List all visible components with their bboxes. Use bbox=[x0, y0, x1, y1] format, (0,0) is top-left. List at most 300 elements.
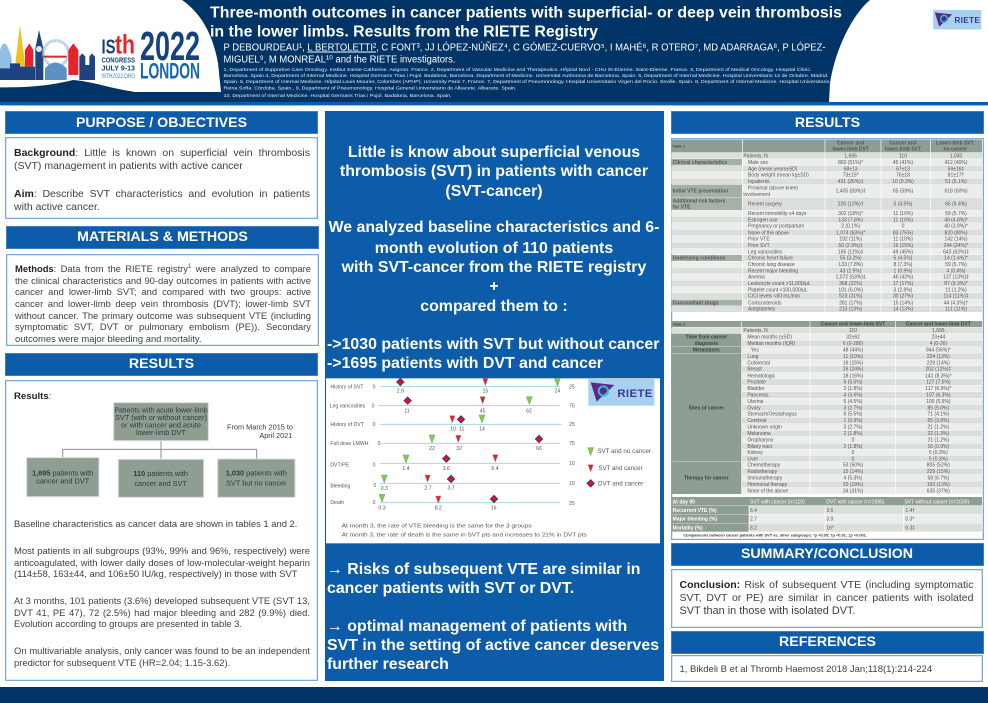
SVT column: 45 (41%) bbox=[893, 160, 913, 166]
SVT column: 16 (15%) bbox=[893, 243, 913, 249]
title: Three-month outcomes in cancer patients with superficial- or deep vein thrombosis bbox=[210, 4, 842, 22]
table 2 row labels: Prostate bbox=[747, 380, 766, 386]
table 2 SVT column: 32±62 bbox=[846, 334, 860, 340]
row labels: Pregnancy or postpartum bbox=[748, 224, 804, 230]
table 2 row labels: Cerebral bbox=[747, 418, 767, 424]
heading: summary / conclusion: SUMMARY/CONCLUSION bbox=[741, 546, 913, 562]
row labels: Anemia bbox=[748, 275, 765, 281]
DVT column: 281 (17%) bbox=[839, 300, 863, 306]
icon: London skyline bbox=[0, 25, 133, 102]
panel: central key messages: Little is know about superficial venous bbox=[348, 144, 640, 161]
category labels: Underlying conditions bbox=[673, 256, 726, 262]
row labels: History of DVT bbox=[330, 422, 365, 428]
row labels: CrCl levels <60 mL/min bbox=[748, 294, 800, 300]
row labels: Chronic lung disease bbox=[748, 262, 795, 268]
row labels: Prior SVT bbox=[748, 243, 770, 249]
row labels: 0 bbox=[373, 483, 376, 489]
table 1: baseline characteristics: no cancer bbox=[944, 147, 967, 153]
DVT column: 43 (2.5%) bbox=[840, 268, 862, 274]
panel: results text and flowchart: Results: bbox=[14, 391, 51, 402]
panel: central key messages: month evolution of 110 patients bbox=[375, 240, 613, 257]
table 3: outcomes at day 90: Comparisons between cancer patients with SVT vs. other subgroups: *p <0.05; †p <0.01; ‡p <0.001. bbox=[683, 533, 867, 537]
table 3: outcomes at day 90: SVT without cancer (n=1030) bbox=[904, 499, 969, 505]
table 2 row labels: Immunotherapy bbox=[747, 475, 783, 481]
table 2 DVT column bbox=[925, 328, 952, 494]
table 2 bands bbox=[671, 327, 982, 494]
panel: purpose text: Background: Little is known on superficial vein thrombosis bbox=[14, 147, 310, 159]
panel: results text and flowchart: At 3 months, 101 patients (3.6%) developed subsequent VTE (SVT 13, bbox=[14, 595, 310, 606]
heading: results right bbox=[671, 111, 984, 134]
DVT column: 2 (0.1%) bbox=[841, 224, 860, 230]
table 2 DVT column: 193 (13%) bbox=[927, 482, 950, 488]
panel: central key messages: + bbox=[489, 278, 499, 295]
panel: results text and flowchart: On multivariable analysis, only cancer was found to be an independent bbox=[14, 645, 310, 656]
table 2 and table 3: cancer details and day 90 outcomes: Cancer and lower-limb SVT bbox=[821, 322, 885, 328]
table 2 SVT column: 2 (1.8%) bbox=[844, 444, 863, 450]
table 2 row labels: Chemotherapy bbox=[747, 463, 781, 469]
no cancer column: 59±16‡ bbox=[948, 166, 965, 172]
table 2 categories: Therapy for cancer bbox=[684, 476, 729, 482]
category labels: Clinical characteristics bbox=[673, 160, 727, 166]
panel: references text: 1, Bikdeli B et al Thromb Haemost 2018 Jan;118(1):214-224 bbox=[680, 664, 932, 675]
table 3: outcomes at day 90: 3.9 bbox=[826, 517, 834, 523]
DVT column: 50 (2.9%)‡ bbox=[838, 243, 863, 249]
value labels: 14 bbox=[479, 427, 485, 433]
row labels bbox=[743, 153, 811, 313]
table 2 DVT column: 635 (37%) bbox=[927, 488, 950, 494]
heading: references bbox=[671, 631, 984, 654]
table 2 row labels: Bladder bbox=[747, 386, 765, 392]
markers: DVT and cancer bbox=[397, 378, 543, 503]
no cancer column: 114 (11%)‡ bbox=[943, 294, 969, 300]
row labels: Patients, N bbox=[743, 153, 768, 159]
value labels: 2.7 bbox=[424, 486, 432, 492]
panel: results text and flowchart: anticoagulated, with lower daily doses of low-molecular-weight heparin bbox=[14, 557, 310, 568]
panel: conclusion text: SVT, DVT or PE) are similar in cancer patients with isolated bbox=[680, 592, 974, 604]
row labels: None of the above bbox=[748, 230, 789, 236]
no cancer column: 4 (0.4%) bbox=[947, 268, 966, 274]
heading: results right: RESULTS bbox=[795, 114, 860, 130]
table 2 row labels: Liver bbox=[747, 456, 759, 462]
table 1: baseline characteristics: Table 1 bbox=[673, 144, 685, 148]
logo: ISTH 2022 London: LONDON bbox=[140, 58, 200, 84]
table 2 DVT column: 21 (1.2%) bbox=[927, 425, 950, 431]
chart footnote: At month 3, the rate of death is the same in SVT pts and increases to 21% in DVT pts bbox=[342, 533, 587, 539]
table 2 SVT column: 26 (24%) bbox=[843, 367, 863, 373]
row bands bbox=[671, 153, 982, 312]
panel: methods text: cancer and lower-limb deep vein thrombosis (DVT); lower-limb SVT bbox=[15, 298, 311, 309]
panel: central key messages bbox=[324, 111, 664, 681]
value labels: 6.4 bbox=[491, 466, 499, 472]
category labels: for VTE bbox=[673, 205, 691, 211]
DVT column: 431 (26%)‡ bbox=[838, 179, 864, 185]
table 2 and table 3: cancer details and day 90 outcomes bbox=[671, 321, 982, 538]
row labels: Age (mean years±SD) bbox=[748, 166, 798, 172]
table 2 DVT column: 229 (14%) bbox=[927, 360, 950, 366]
no cancer column: 87 (9.3%)* bbox=[944, 281, 968, 287]
table 2 SVT column: 0 bbox=[852, 437, 855, 443]
affiliations: Reina Sofía. Córdoba. Spain., 9, Department of Pneumonology. Hospital General Universitario de Albacete. Albacete. Spain. bbox=[224, 85, 516, 91]
table 3: outcomes at day 90: 0.3* bbox=[905, 517, 914, 523]
table 2 DVT column: 229 (15%) bbox=[927, 469, 950, 475]
table 2 categories: Sites of cancer bbox=[689, 406, 724, 412]
table 2 row labels: Melanoma bbox=[747, 431, 771, 437]
table 2 row labels: Median months (IQR) bbox=[747, 341, 795, 347]
logo: RIETE: RIETE bbox=[617, 388, 653, 400]
DVT column: 1,072 (63%)‡ bbox=[836, 275, 866, 281]
table 2 DVT column: 85 (5.0%) bbox=[927, 405, 950, 411]
no cancer column: 137 (13%)‡ bbox=[943, 275, 969, 281]
SVT column: 110 bbox=[899, 153, 907, 159]
table 2 SVT column: 6 (0-280) bbox=[843, 341, 863, 347]
table 2 DVT column: 5 (0.3%) bbox=[929, 450, 948, 456]
SVT column: 5 (4.5%) bbox=[894, 202, 913, 208]
no cancer column: 820 (80%) bbox=[944, 230, 968, 236]
table 1: baseline characteristics: Cancer and bbox=[889, 141, 917, 147]
DVT column: 860 (51%)* bbox=[838, 160, 863, 166]
table 1: baseline characteristics: lower-limb DVT bbox=[832, 147, 869, 153]
SVT column: 67±13 bbox=[896, 166, 910, 172]
panel: methods text: symptomatic SVT, DVT or pulmonary embolism (PE)). Secondary bbox=[15, 321, 311, 332]
SVT column: 3 (2.9%) bbox=[894, 287, 913, 293]
authors: MIGUEL⁹, M MONREAL¹⁰ and the RIETE investigators. bbox=[224, 54, 456, 66]
table 2 DVT column: 58 (6.7%) bbox=[927, 475, 950, 481]
SVT column: 8 (7.3%) bbox=[894, 262, 913, 268]
affiliations: Spain. 6, Department of Internal Medicine. Hôpital Louis Mourier, Colombes (APHP), University Paris 7. France. 7, Department of Pneumonology. Hospital Universitario Virgen del Rocío. Seville. Spain. 8, Department of Internal Medicine. Hospital Universitario bbox=[224, 79, 830, 85]
value labels: 8.2 bbox=[435, 505, 442, 511]
panel: central key messages: → Risks of subsequent VTE are similar in bbox=[327, 561, 640, 578]
value labels: 24 bbox=[554, 389, 560, 395]
panel: central key messages: thrombosis (SVT) in patients with cancer bbox=[340, 163, 648, 180]
SVT column bbox=[892, 153, 914, 313]
row labels: Full dose LMWH bbox=[330, 441, 369, 447]
title: in the lower limbs. Results from the RIETE Registry bbox=[210, 24, 598, 40]
table 3: outcomes at day 90: 16* bbox=[826, 525, 834, 531]
table 2 DVT column: 117 (6.9%)* bbox=[925, 386, 951, 392]
no cancer column: 59 (5.7%) bbox=[945, 262, 967, 268]
panel: results text and flowchart: Baseline characteristics as cancer data are shown in tables 1 and 2. bbox=[14, 518, 297, 529]
chart footnote: At month 3, the rate of VTE bleeding is the same for the 3 groups bbox=[342, 524, 532, 530]
panel: central key messages: → optimal management of patients with bbox=[327, 618, 627, 635]
table 1: baseline characteristics bbox=[671, 140, 982, 313]
table 2 SVT column: 18 (16%) bbox=[843, 373, 863, 379]
logo: ISTH 2022 London: JULY 9-13 bbox=[102, 66, 135, 72]
panel: methods text: the clinical characteristics and 90-day outcomes in patients with active bbox=[15, 275, 311, 286]
table 2 and table 3: cancer details and day 90 outcomes: Table 2 bbox=[673, 322, 685, 326]
table 2 DVT column: 65 (3.8%) bbox=[927, 418, 950, 424]
row labels: 25 bbox=[569, 501, 575, 507]
table 2 SVT column: 53 (50%) bbox=[843, 463, 863, 469]
table 2 SVT column: 15 (14%) bbox=[843, 469, 863, 475]
panel: results text and flowchart: Most patients in all subgroups (93%, 99% and 96%, respectively) were bbox=[14, 545, 310, 556]
heading: results left bbox=[5, 352, 318, 376]
panel: central key messages: with SVT-cancer from the RIETE registry bbox=[342, 259, 646, 276]
panel: central key messages: compared them to : bbox=[420, 298, 568, 315]
no cancer column: 11 (1.2%) bbox=[945, 287, 967, 293]
no cancer column: 51 (5.1%) bbox=[945, 179, 967, 185]
table 1: baseline characteristics: Lower-limb SVT, bbox=[936, 141, 975, 147]
markers: SVT and no cancer bbox=[379, 378, 560, 502]
row labels: Leg varicosities bbox=[330, 404, 366, 410]
table 3: outcomes at day 90: 1.4† bbox=[905, 508, 915, 514]
SVT column: 11 (10%) bbox=[893, 217, 913, 223]
flowchart: patient groups: or with cancer and acute bbox=[121, 420, 201, 429]
DVT column: 213 (13%) bbox=[839, 307, 863, 313]
table 2 SVT column: 6 (5.5%) bbox=[844, 412, 863, 418]
table 2 DVT column: 127 (7.5%) bbox=[926, 380, 951, 386]
DVT column: 226 (13%)† bbox=[838, 202, 864, 208]
authors: P DEBOURDEAU¹, L BERTOLETTI², C FONT³, JJ LÓPEZ-NÚÑEZ⁴, C GÓMEZ-CUERVO⁵, I MAHÉ⁶, R OTERO⁷, MD ADARRAGA⁸, P LÓPEZ- bbox=[224, 40, 826, 54]
row labels: Recent major bleeding bbox=[748, 268, 798, 274]
logo: ISTH 2022 London: th bbox=[115, 30, 135, 60]
heading: materials and methods: MATERIALS & METHODS bbox=[77, 229, 248, 245]
DVT column: 1,695 bbox=[844, 153, 857, 159]
row labels: 75 bbox=[569, 403, 575, 409]
flowchart: patient groups: 110 patients with bbox=[133, 469, 188, 478]
no cancer column: 244 (24%)* bbox=[943, 243, 969, 249]
logo: ISTH 2022 London: CONGRESS bbox=[102, 58, 135, 64]
row labels: involvement bbox=[743, 192, 771, 198]
SVT column: 46 (42%) bbox=[893, 275, 913, 281]
panel: central key messages: further research bbox=[327, 656, 449, 673]
table 2 row labels: Unknown origin bbox=[747, 425, 782, 431]
table 2 SVT column: 3 (2.7%) bbox=[844, 405, 863, 411]
header banner bbox=[0, 0, 988, 106]
row labels: Recent surgery bbox=[748, 202, 782, 208]
value labels: 66 bbox=[536, 446, 542, 452]
panel: methods text: without cancer. The primary outcome was subsequent VTE (including bbox=[15, 310, 311, 321]
table 2 row labels: Pancreas bbox=[747, 393, 769, 399]
table 2 SVT column: 20 (19%) bbox=[843, 482, 863, 488]
table 2 DVT column: 107 (6.3%) bbox=[926, 393, 951, 399]
no cancer column: 40 (3.9%)* bbox=[944, 224, 968, 230]
table 2 row labels: Biliary tract bbox=[747, 444, 773, 450]
value labels: 15 bbox=[482, 389, 488, 395]
SVT column: 11 (10%) bbox=[893, 237, 913, 243]
table 2 row labels: Ovary bbox=[747, 405, 761, 411]
table 2 SVT column: 0 bbox=[852, 456, 855, 462]
table 2 row labels bbox=[743, 328, 797, 494]
legend: DVT and cancer bbox=[598, 481, 643, 487]
no cancer column: 1,030 bbox=[950, 153, 962, 159]
no cancer column: 49 (4.8%)* bbox=[944, 217, 968, 223]
row labels: Inpatients bbox=[748, 179, 770, 185]
table 1: baseline characteristics: lower-limb SVT bbox=[885, 147, 921, 153]
SVT column: 1 (0.9%) bbox=[894, 268, 913, 274]
logo: ISTH 2022 London: IS bbox=[102, 36, 116, 58]
table 2 SVT column: 11 (10%) bbox=[843, 354, 863, 360]
table 2 DVT column: 21 (1.2%) bbox=[927, 437, 950, 443]
DVT column: 185 (11%)‡ bbox=[838, 249, 864, 255]
table 2 SVT column: 2 (1.8%) bbox=[844, 431, 863, 437]
row labels: History of SVT bbox=[330, 384, 364, 390]
table 3: outcomes at day 90: 3.6 bbox=[826, 508, 834, 514]
panel: central key messages: We analyzed baseline characteristics and 6- bbox=[329, 219, 659, 236]
table 2 DVT column: 202 (12%)‡ bbox=[925, 367, 951, 373]
logo: RIETE bbox=[588, 379, 654, 406]
row labels: 0 bbox=[373, 422, 376, 428]
SVT column: 83 (75%) bbox=[893, 230, 913, 236]
value labels: 62 bbox=[526, 408, 532, 414]
row labels: 0 bbox=[373, 463, 376, 469]
value labels: 32 bbox=[456, 446, 462, 452]
row labels: 10 bbox=[569, 481, 575, 487]
panel: purpose text: with active cancer. bbox=[14, 201, 100, 213]
legend: SVT and no cancer bbox=[597, 449, 651, 455]
table 2 row labels: Uterine bbox=[747, 399, 764, 405]
panel: results text and flowchart: DVT 41, PE 47), 72 (2.5%) had major bleeding and 282 (9.9%) died. bbox=[14, 607, 310, 618]
logo: ISTH 2022 London bbox=[102, 23, 200, 84]
DVT column: 1,074 (63%)* bbox=[836, 230, 865, 236]
table 2 DVT column: 141 (8.3%)* bbox=[925, 373, 952, 379]
panel: results text and flowchart: (114±58, 163±44, and 106±50 IU/kg, respectively) in those with SVT bbox=[14, 568, 298, 579]
table 2 row labels: Stomach/Oesophagus bbox=[747, 412, 797, 418]
DVT column: 368 (22%) bbox=[839, 281, 863, 287]
panel: references text bbox=[670, 655, 983, 682]
title bbox=[210, 4, 842, 40]
SVT column: 11 (10%) bbox=[893, 211, 913, 217]
table 3: outcomes at day 90: DVT with cancer (n=1695) bbox=[826, 499, 885, 505]
table 2 row labels: Colorectal bbox=[747, 360, 770, 366]
table 2 SVT column: 2 (1.8%) bbox=[844, 386, 863, 392]
value labels: 45 bbox=[480, 408, 486, 414]
table 3: outcomes at day 90: 6.4 bbox=[750, 508, 757, 514]
table 2 row labels: Hormonal therapy bbox=[747, 482, 788, 488]
panel: central key messages: ->1695 patients with DVT and cancer bbox=[327, 355, 603, 372]
table 2 SVT column: 5 (4.5%) bbox=[844, 399, 863, 405]
table 2 and table 3: cancer details and day 90 outcomes: Cancer and lower-limb DVT bbox=[906, 322, 971, 328]
panel: central key messages: cancer patients with SVT or DVT. bbox=[327, 580, 574, 597]
table 2 DVT column: 4 (0-26) bbox=[930, 341, 947, 347]
SVT column: 65 (59%) bbox=[893, 189, 913, 195]
table 3: outcomes at day 90: Major bleeding (%) bbox=[673, 517, 717, 523]
row labels: Male sex bbox=[748, 160, 769, 166]
no cancer column: 111 (11%) bbox=[945, 307, 967, 313]
chart footnote bbox=[342, 524, 587, 539]
no cancer column: 412 (40%) bbox=[944, 160, 968, 166]
table 2 DVT column: 5 (0.3%) bbox=[929, 456, 948, 462]
value labels: 16 bbox=[491, 505, 497, 511]
table 3: outcomes at day 90: Mortality (%) bbox=[673, 525, 703, 531]
heading: summary / conclusion bbox=[670, 543, 984, 566]
row labels: Estrogen use bbox=[748, 217, 778, 223]
row labels: 10 bbox=[569, 461, 575, 467]
panel: results tables bbox=[670, 138, 984, 540]
panel: central key messages: ->1030 patients with SVT but without cancer bbox=[327, 336, 659, 353]
row labels: Prior VTE bbox=[748, 237, 770, 243]
table 2 SVT column: 110 bbox=[849, 328, 857, 334]
row labels: Proximal (above knee) bbox=[748, 186, 798, 192]
table 2 row labels: Patients, N bbox=[743, 328, 768, 334]
category labels: Concomitant drugs bbox=[673, 300, 719, 306]
affiliations: Barcelona. Spain.4, Department of Internal Medicine. Hospital Germans Trias i Pujol. Badalona, Barcelona. Department of Medicine. Universitat Autònoma de Barcelona. Spain. 5, Department of Internal Medicine. Hospital Universitario 12 de Octubre. Madrid. bbox=[224, 73, 828, 79]
flowchart: patient groups: April 2021 bbox=[259, 431, 292, 440]
table 2 DVT column: 1,695 bbox=[932, 328, 945, 334]
DVT column: 192 (11%) bbox=[839, 237, 862, 243]
table 2 DVT column: 224 (13%) bbox=[927, 354, 950, 360]
table 2 row labels: Kidney bbox=[747, 450, 763, 456]
table 2 categories: diagnosis bbox=[695, 341, 718, 347]
table 2 DVT column: 16 (0.9%) bbox=[927, 444, 950, 450]
row labels: 0 bbox=[372, 404, 375, 410]
value labels: 3.6 bbox=[443, 466, 450, 472]
table 2 categories bbox=[684, 335, 729, 482]
DVT column: 55 (3.2%) bbox=[840, 256, 862, 262]
heading: results left: RESULTS bbox=[129, 356, 194, 372]
panel: purpose text: Aim: Describe SVT characteristics and evolution in patients bbox=[14, 188, 310, 200]
flowchart: patient groups: SVT (with or without cancer) bbox=[115, 413, 207, 422]
flowchart: patient groups: SVT but no cancer bbox=[226, 479, 287, 488]
row labels: Bleeding bbox=[330, 483, 351, 489]
SVT column: 15 (14%) bbox=[893, 300, 913, 306]
SVT column: 49 (45%) bbox=[893, 249, 913, 255]
DVT column: 73±15* bbox=[843, 173, 859, 179]
row labels: Leg varicosities bbox=[748, 249, 783, 255]
flowchart: patient groups: From March 2015 to bbox=[227, 422, 293, 431]
row labels: Chronic heart failure bbox=[748, 256, 793, 262]
legend bbox=[587, 448, 651, 487]
panel: central key messages: (SVT-cancer) bbox=[445, 183, 543, 200]
table 2 DVT column: 23±44 bbox=[931, 334, 945, 340]
footer band bbox=[0, 687, 988, 703]
flowchart: patient groups: Patients with acute lower-limb bbox=[114, 406, 208, 415]
table 2 SVT column: 16 (15%) bbox=[843, 360, 863, 366]
table 2 row labels: None of the above bbox=[747, 488, 788, 494]
table 2 SVT column: 1 (0.9%) bbox=[844, 418, 863, 424]
value labels: 1.4 bbox=[402, 466, 410, 472]
panel: results text and flowchart: Evolution according to groups are presented in table 3. bbox=[14, 618, 242, 629]
panel: conclusion text bbox=[670, 569, 983, 628]
panel: methods text: outcomes were major bleeding and mortality. bbox=[15, 333, 201, 344]
row labels: DVT/PE bbox=[330, 463, 350, 469]
affiliations: 10, Department of Internal Medicine. Hospital Germans Trias i Pujol. Badalona, Barcelona. Spain. bbox=[224, 93, 452, 99]
markers: SVT and cancer bbox=[425, 378, 498, 503]
value labels: 22 bbox=[429, 446, 435, 452]
table 2 DVT column: 805 (52%) bbox=[927, 463, 950, 469]
category labels: Initial VTE presentation bbox=[673, 189, 728, 195]
table 2 DVT column: 100 (5.9%) bbox=[926, 399, 951, 405]
table 2 SVT column: 4 (5.3%) bbox=[844, 475, 863, 481]
flowchart: patient groups: lower-limb DVT bbox=[136, 428, 187, 437]
table 2 SVT column: 34 (31%) bbox=[843, 488, 863, 494]
table 2 row labels: Breast bbox=[747, 367, 762, 373]
flowchart: patient groups: cancer and SVT bbox=[134, 479, 187, 488]
DVT column: 101 (6.0%) bbox=[838, 287, 863, 293]
DVT column: 302 (18%)* bbox=[838, 211, 863, 217]
value labels: 0.3 bbox=[378, 506, 386, 512]
heading: purpose / objectives: PURPOSE / OBJECTIVES bbox=[76, 114, 247, 130]
value labels bbox=[378, 389, 560, 512]
logo: ISTH 2022 London: 2022 bbox=[140, 23, 200, 69]
heading: references: REFERENCES bbox=[779, 634, 876, 650]
row labels: Platelet count <100,000/μL bbox=[748, 287, 808, 293]
table 2 DVT column: 944 (56%)* bbox=[926, 348, 951, 354]
no cancer column bbox=[943, 153, 969, 313]
table 2 DVT column: 22 (1.3%) bbox=[927, 431, 950, 437]
logo: RIETE top right bbox=[933, 10, 982, 30]
table 3: outcomes at day 90: Recurrent VTE (%) bbox=[673, 508, 717, 514]
value labels: 3.7 bbox=[447, 486, 455, 492]
SVT column: 76±18 bbox=[896, 173, 910, 179]
logo: ISTH 2022 London: ISTH2022.ORG bbox=[102, 74, 135, 80]
no cancer column: 81±17† bbox=[948, 173, 965, 179]
table 1: baseline characteristics: Cancer and bbox=[837, 141, 864, 147]
legend: SVT and cancer bbox=[598, 466, 643, 472]
row labels: 0 bbox=[378, 441, 381, 447]
no cancer column: 14 (1.4%)* bbox=[944, 256, 968, 262]
row labels: 75 bbox=[569, 441, 575, 447]
row labels: Corticosteroids bbox=[748, 300, 782, 306]
